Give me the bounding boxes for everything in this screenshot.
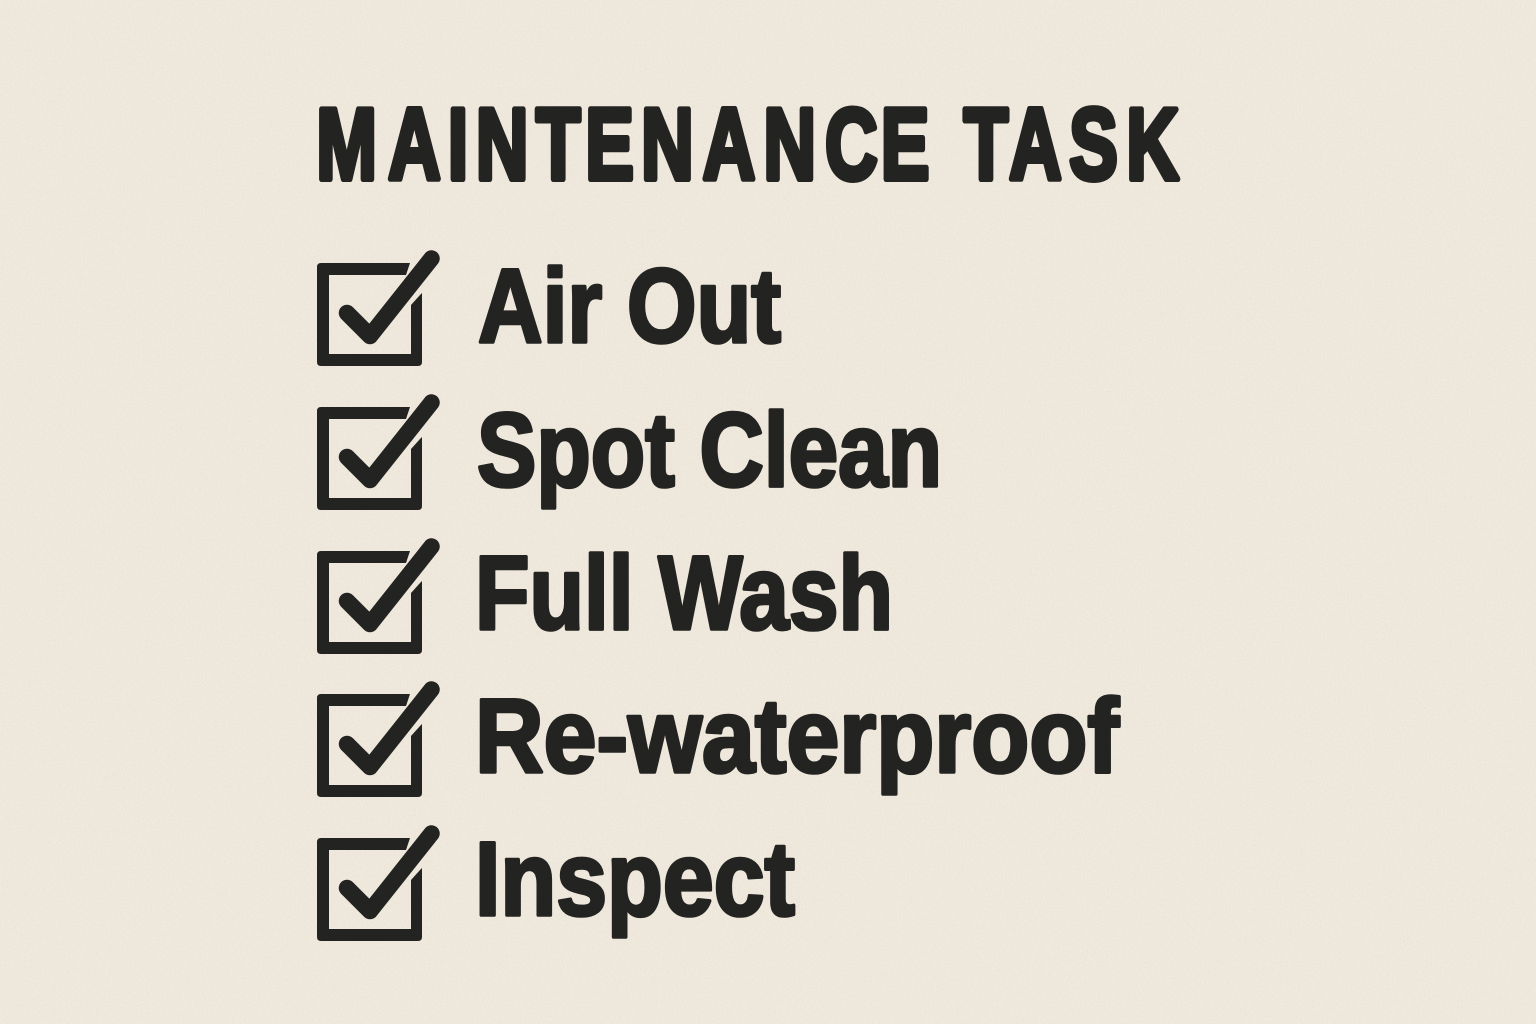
label: Full Wash: Full Wash (475, 535, 893, 652)
icon: checked box (317, 690, 432, 797)
icon: checked box (317, 402, 432, 510)
icon: checked box (317, 834, 432, 941)
icon: checked box (317, 546, 432, 654)
item: Spot Clean (317, 392, 942, 510)
item: Full Wash (317, 535, 893, 654)
title: MAINTENANCE TASK (316, 87, 1179, 201)
label: Spot Clean: Spot Clean (477, 392, 942, 509)
item: Inspect (317, 821, 795, 941)
item: Re-waterproof (317, 678, 1120, 797)
checklist (317, 248, 1120, 941)
label: Air Out: Air Out (478, 248, 781, 365)
label: Re-waterproof: Re-waterproof (475, 678, 1120, 795)
item: Air Out (317, 248, 781, 366)
icon: checked box (317, 258, 432, 366)
label: Inspect: Inspect (475, 821, 795, 938)
